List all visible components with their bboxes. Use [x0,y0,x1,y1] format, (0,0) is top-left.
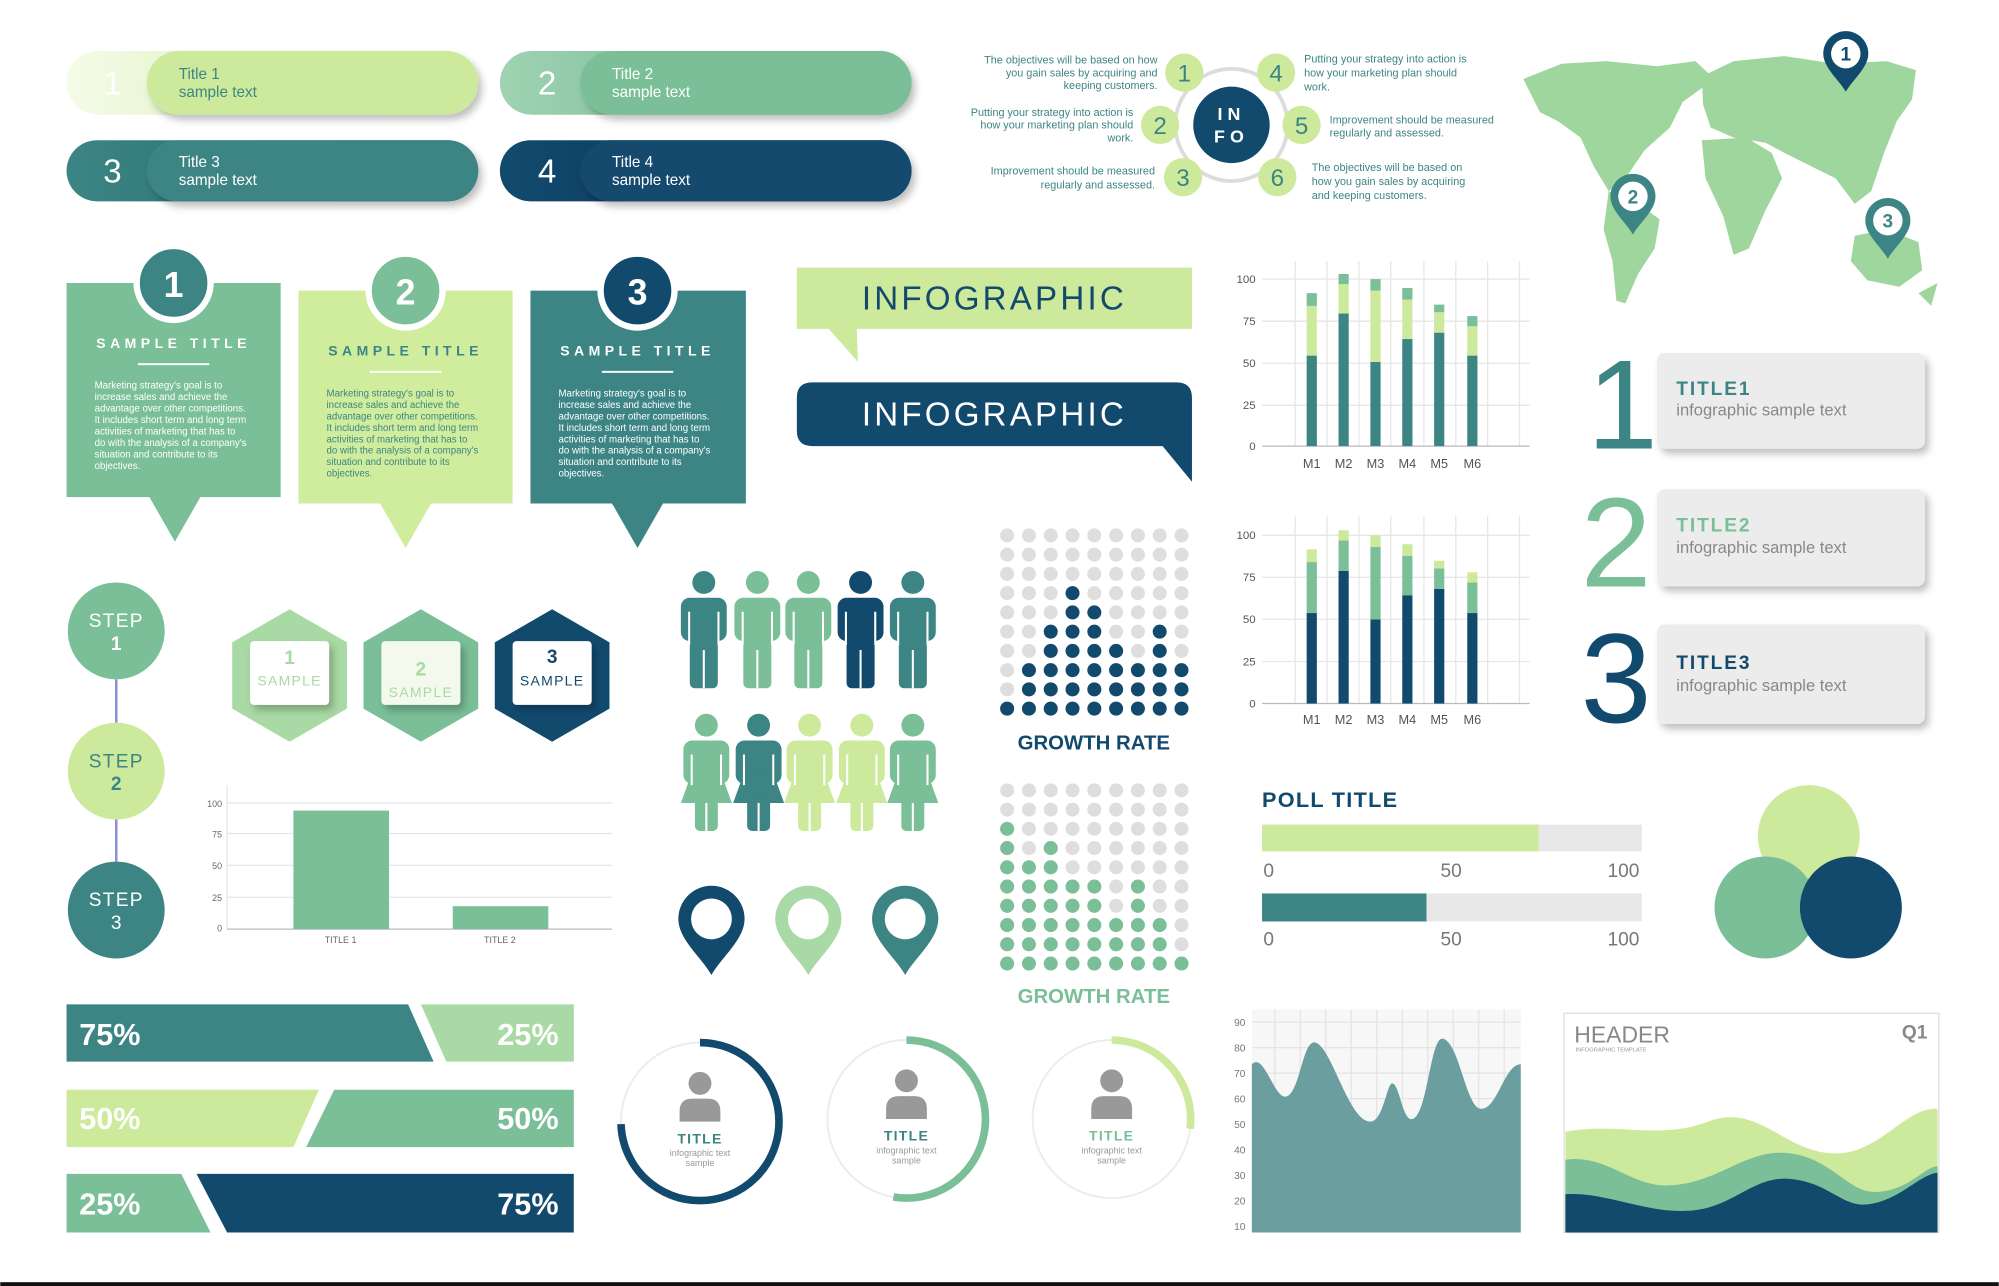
hexagon 1: SAMPLE [257,673,322,689]
stacked bar chart 1: 100 [1237,274,1256,286]
bar chart: title 1 vs title 2: 0 [217,924,222,934]
panel: sample title 3: Marketing strategy's goal is to [559,388,686,399]
panel: sample title 1: SAMPLE TITLE [96,335,251,351]
side card: title2: TITLE2 [1676,515,1751,536]
pill: title 4: Title 4 [612,154,654,171]
side card: title2 [1581,472,1925,614]
people icons [681,571,938,831]
side card: title1: TITLE1 [1676,379,1751,400]
panel: sample title 1 [67,246,281,542]
info wheel: 4 [1269,61,1283,88]
banner: infographic navy: INFOGRAPHIC [862,397,1127,434]
progress circle 3 [1033,1040,1191,1198]
hexagon 2 [364,609,478,742]
hexagon 3: 3 [547,647,557,668]
pill: title 4: 4 [538,153,556,190]
hexagon 2: SAMPLE [389,684,453,700]
panel: sample title 2: do with the analysis of a company's [327,446,479,457]
panel: sample title 2: situation and contribute to its [327,457,450,468]
pill: title 2 [500,51,912,115]
map pin 2 [1610,174,1655,235]
panel: sample title 3: activities of marketing that has to [559,434,699,445]
dot chart: growth rate green [1007,790,1182,1008]
percent bar 50/50 [67,1090,574,1147]
hexagon 3: SAMPLE [520,673,584,689]
panel: sample title 3: increase sales and achieve the [559,400,691,411]
steps timeline [68,582,165,958]
progress circle 2: TITLE [884,1128,929,1144]
banner: infographic lime: INFOGRAPHIC [862,281,1127,318]
panel: sample title 2: objectives. [327,469,372,480]
stacked bar chart 1: M4 [1398,456,1416,471]
stacked bar chart 2: 25 [1243,656,1256,668]
bar chart: title 1 vs title 2: 25 [212,893,222,903]
info wheel: The objectives will be based on [1312,162,1462,174]
stacked bar chart 1: M1 [1303,456,1321,471]
info wheel: 2 [1153,113,1167,140]
pill: title 4 [500,140,912,201]
panel: sample title 3: situation and contribute to its [559,457,682,468]
bar chart: title 1 vs title 2: TITLE 2 [484,935,516,945]
stacked bar chart 2: 0 [1249,698,1256,710]
info wheel: 3 [1176,165,1190,192]
percent bar 50/50: 50% [497,1102,559,1136]
steps timeline: STEP [89,890,144,911]
info wheel: how your marketing plan should [1304,67,1457,79]
pill: title 2: 2 [538,65,556,102]
panel: sample title 1: objectives. [95,461,140,472]
panel: sample title 2: 2 [396,273,415,313]
stacked bar chart 2: M4 [1398,712,1416,727]
stacked bar chart 1: M6 [1463,456,1481,471]
info wheel: and keeping customers. [1312,190,1427,202]
dot chart: growth rate green: GROWTH RATE [1018,986,1170,1008]
pill: title 1 [67,51,478,115]
venn diagram [1715,785,1902,958]
stacked bar chart 1: 25 [1243,400,1256,412]
hexagon 1 [232,609,347,742]
side card: title2: infographic sample text [1676,538,1847,557]
header wave chart: Q1 [1902,1023,1928,1044]
info wheel: 1 [1178,61,1191,88]
dot chart: growth rate navy: GROWTH RATE [1018,732,1170,754]
poll: 50 [1440,861,1462,882]
stacked bar chart 2: M6 [1463,712,1481,727]
steps timeline: STEP [89,611,144,632]
pill: title 3: sample text [179,172,258,189]
panel: sample title 2 [299,254,513,548]
map pin 3 [1865,198,1910,259]
pill: title 3: Title 3 [179,154,220,171]
stacked bar chart 1: M3 [1367,456,1384,471]
poll: 0 [1263,861,1274,882]
hexagon 2: 2 [416,660,426,681]
steps timeline: 2 [111,774,122,795]
progress circle 2: sample [892,1156,921,1166]
info wheel: regularly and assessed. [1041,180,1155,192]
panel: sample title 2: increase sales and achieve the [327,400,459,411]
map pin 3: 3 [1883,212,1893,233]
percent bar 75/25: 75% [79,1018,140,1052]
steps timeline: 1 [111,634,122,655]
map pin 1: 1 [1840,45,1851,66]
info wheel: 5 [1295,113,1308,140]
panel: sample title 3: It includes short term and long term [559,423,710,434]
info wheel: Improvement should be measured [991,166,1155,178]
world map [1523,56,1938,306]
info wheel: 6 [1271,165,1284,192]
stacked bar chart 2: 50 [1243,614,1256,626]
info wheel: Improvement should be measured [1330,115,1494,127]
poll [1262,787,1642,951]
side card: title1: infographic sample text [1676,400,1847,419]
pill: title 2: Title 2 [612,66,653,83]
stacked bar chart 1: M5 [1430,456,1448,471]
stacked bar chart 2: 75 [1243,572,1256,584]
panel: sample title 3 [530,254,746,548]
info wheel: how your marketing plan should [980,120,1133,132]
area chart [1234,1009,1521,1233]
panel: sample title 3: advantage over other competitions. [559,411,710,422]
header wave chart [1564,1013,1939,1232]
panel: sample title 1: 1 [164,265,184,305]
stacked bar chart 1: 75 [1243,316,1256,328]
stacked bar chart 2: M2 [1335,712,1352,727]
header wave chart: HEADER [1574,1022,1670,1048]
stacked bar chart 2: M1 [1303,712,1321,727]
stacked bar chart 1: 50 [1243,358,1256,370]
panel: sample title 2: SAMPLE TITLE [328,343,483,359]
steps timeline: 3 [111,913,122,934]
info wheel: keeping customers. [1064,80,1158,92]
map pin 2: 2 [1628,187,1638,208]
panel: sample title 3: objectives. [559,469,604,480]
bar chart: title 1 vs title 2: 75 [212,829,222,839]
panel: sample title 1: activities of marketing that has to [95,427,235,438]
pill: title 3: 3 [103,153,122,190]
area chart: 20 [1234,1196,1246,1207]
progress circle 3: infographic text [1081,1145,1142,1155]
info wheel [971,53,1494,202]
pill: title 2: sample text [612,84,691,101]
panel: sample title 1: do with the analysis of a company's [95,438,247,449]
poll: 50 [1440,930,1462,951]
hexagon 1: 1 [284,648,295,669]
info wheel: Putting your strategy into action is [1304,53,1467,65]
stacked bar chart 2: 100 [1237,530,1256,542]
stacked bar chart 1: 0 [1249,441,1256,453]
progress circle 1: sample [686,1158,714,1168]
side card: title3 [1581,609,1925,751]
panel: sample title 3: SAMPLE TITLE [560,343,715,359]
area chart: 90 [1234,1018,1246,1029]
stacked bar chart 1 [1237,261,1530,471]
panel: sample title 1: situation and contribute to its [95,450,218,461]
poll: 100 [1607,861,1639,882]
percent bar 75/25: 25% [497,1018,559,1052]
dot chart: growth rate navy [1007,535,1182,754]
header wave chart: INFOGRAPHIC TEMPLATE [1576,1047,1647,1053]
poll: 0 [1263,930,1274,951]
info wheel: The objectives will be based on how [984,55,1158,67]
bar chart: title 1 vs title 2: 50 [212,861,222,871]
bar chart: title 1 vs title 2 [207,785,612,945]
stacked bar chart 1: M2 [1335,456,1352,471]
panel: sample title 1: advantage over other competitions. [95,404,246,415]
area chart: 40 [1234,1145,1246,1156]
side card: title3: infographic sample text [1676,676,1847,695]
panel: sample title 2: advantage over other competitions. [327,411,478,422]
pill: title 1: sample text [179,84,258,101]
side card: title3: 3 [1581,609,1652,751]
steps timeline: STEP [89,751,144,772]
side card: title1 [1587,335,1925,477]
info wheel: FO [1214,127,1249,147]
panel: sample title 2: Marketing strategy's goal is to [327,388,454,399]
area chart: 30 [1234,1171,1246,1182]
side card: title3: TITLE3 [1676,653,1751,674]
pill: title 4: sample text [612,172,691,189]
panel: sample title 3: do with the analysis of a company's [559,446,711,457]
stacked bar chart 2: M5 [1430,712,1448,727]
percent bar 50/50: 50% [79,1102,140,1136]
panel: sample title 2: activities of marketing that has to [327,434,467,445]
panel: sample title 2: It includes short term and long term [327,423,478,434]
area chart: 70 [1234,1069,1246,1080]
bar chart: title 1 vs title 2: TITLE 1 [325,935,356,945]
side card: title1: 1 [1587,335,1658,477]
side card: title2: 2 [1581,472,1652,614]
info wheel: Putting your strategy into action is [971,107,1134,119]
poll: 100 [1607,930,1639,951]
info wheel: you gain sales by acquiring and [1006,67,1158,79]
area chart: 80 [1234,1043,1246,1054]
info wheel: regularly and assessed. [1330,127,1444,139]
progress circle 1: TITLE [677,1130,723,1146]
progress circle 3: sample [1097,1156,1126,1166]
panel: sample title 1: Marketing strategy's goal is to [95,381,222,392]
info wheel: IN [1217,104,1245,124]
stacked bar chart 2 [1237,516,1530,727]
map pin 1 [1823,31,1868,92]
progress circle 1 [621,1043,779,1201]
pill: title 1: Title 1 [179,66,220,83]
stacked bar chart 2: M3 [1367,712,1384,727]
percent bar 25/75: 25% [79,1188,140,1222]
progress circle 1: infographic text [670,1148,731,1158]
bar chart: title 1 vs title 2: 100 [207,799,222,809]
progress circle 2 [827,1040,985,1198]
percent bar 25/75 [67,1174,574,1232]
hexagon 3 [495,609,609,742]
progress circle 2: infographic text [876,1145,937,1155]
area chart: 50 [1234,1120,1246,1131]
panel: sample title 3: 3 [628,273,647,313]
info wheel: work. [1106,132,1133,144]
info wheel: how you gain sales by acquiring [1312,176,1465,188]
pill: title 1: 1 [103,65,122,102]
location pins row [678,886,938,975]
percent bar 75/25 [67,1004,574,1062]
poll: POLL TITLE [1262,787,1398,812]
panel: sample title 1: It includes short term and long term [95,415,246,426]
area chart: 60 [1234,1094,1246,1105]
banner: infographic lime [797,268,1192,362]
area chart: 10 [1234,1222,1246,1233]
panel: sample title 1: increase sales and achieve the [95,392,227,403]
banner: infographic navy [797,382,1192,482]
progress circle 3: TITLE [1089,1128,1134,1144]
pill: title 3 [67,140,478,201]
info wheel: work. [1303,81,1330,93]
percent bar 25/75: 75% [497,1188,559,1222]
